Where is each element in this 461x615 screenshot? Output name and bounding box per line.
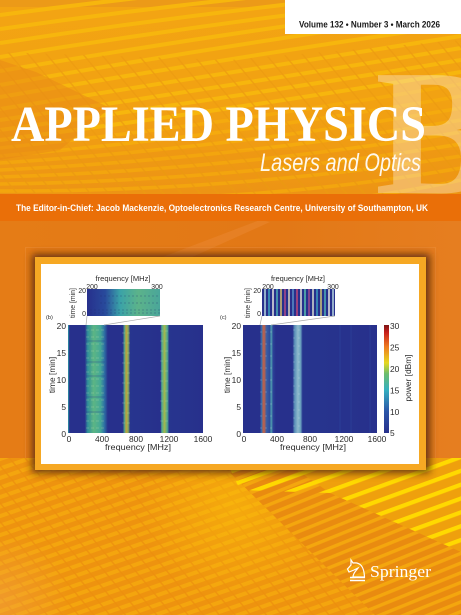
axis labels c: time [min] [222,357,232,393]
axis labels b: 300 [151,284,163,291]
axis labels c: 5 [236,402,241,412]
background: upper woven stripes [0,0,461,208]
journal subtitle: Lasers and Optics [260,149,421,177]
axis labels c: power [dBm] [403,354,413,402]
axis labels c: frequency [MHz] [271,276,325,283]
axis labels c: 5 [390,428,395,438]
axis labels b: 200 [86,284,98,291]
axis labels c: frequency [MHz] [280,442,346,452]
axis labels c: (c) [220,315,227,321]
publisher logo: Springer: Springer [370,562,432,581]
axis labels c: 0 [242,434,247,444]
axis labels c: 0 [236,429,241,439]
axis labels c: 20 [253,288,261,295]
axis labels b: (b) [46,315,53,321]
axis labels c: 1600 [368,434,387,444]
axis labels c: 10 [390,407,400,417]
publisher logo: Springer [348,560,432,581]
axis labels b: 1600 [194,434,213,444]
figure panel [32,254,430,473]
inset heatmap b [87,289,160,316]
editor-in-chief band [0,194,461,221]
axis labels b: 0 [61,429,66,439]
axis labels b: frequency [MHz] [96,276,151,283]
axis labels c: 1200 [335,434,354,444]
axis labels b [46,276,213,452]
zoom connector lines c [260,316,335,325]
axis labels b: 5 [61,402,66,412]
background: lower woven stripes [0,458,461,615]
axis labels c: 15 [232,348,241,358]
axis labels c: 20 [390,364,400,374]
axis labels c: 0 [257,311,261,318]
axis labels c: time [min] [245,288,252,318]
colour bar [384,325,389,433]
axis labels b: 0 [67,434,72,444]
axis labels c: 300 [327,284,339,291]
axis labels b: 20 [78,288,86,295]
axis labels b: 15 [57,348,66,358]
axis labels b: 800 [129,434,143,444]
axis labels b: time [min] [47,357,57,393]
background: orange block behind the figure [0,220,461,472]
axis labels b: 20 [57,321,66,331]
axis labels b: frequency [MHz] [105,442,171,452]
axis labels c: 800 [303,434,317,444]
icon: chess knight [348,560,365,580]
axis labels b: 0 [82,311,86,318]
axis labels c: 400 [270,434,284,444]
issue info box: Volume 132 • Number 3 • March 2026 [299,18,440,30]
axis labels c: 200 [262,284,274,291]
zoom connector lines b [86,316,160,325]
journal title: APPLIED PHYSICS [11,97,426,153]
inset heatmap c [262,289,335,316]
axis labels c: 15 [390,386,400,396]
chart c: spectrogram with inset and colour bar [220,276,413,452]
axis labels c: 10 [232,375,241,385]
chart b: spectrogram with inset [46,276,213,452]
axis labels c [220,276,413,452]
axis labels b: 400 [95,434,109,444]
axis labels b: time [min] [70,288,77,318]
axis labels b: 10 [57,375,66,385]
axis labels c: 25 [390,342,400,352]
editor-in-chief band: The Editor-in-Chief: Jacob Mackenzie, Optoelectronics Research Centre, University of Southampton, UK [16,203,429,213]
axis labels c: 30 [390,321,400,331]
main heatmap c [243,325,377,433]
axis labels c: 20 [232,321,241,331]
issue info box [285,0,461,34]
main heatmap b [68,325,203,433]
axis labels b: 1200 [160,434,179,444]
